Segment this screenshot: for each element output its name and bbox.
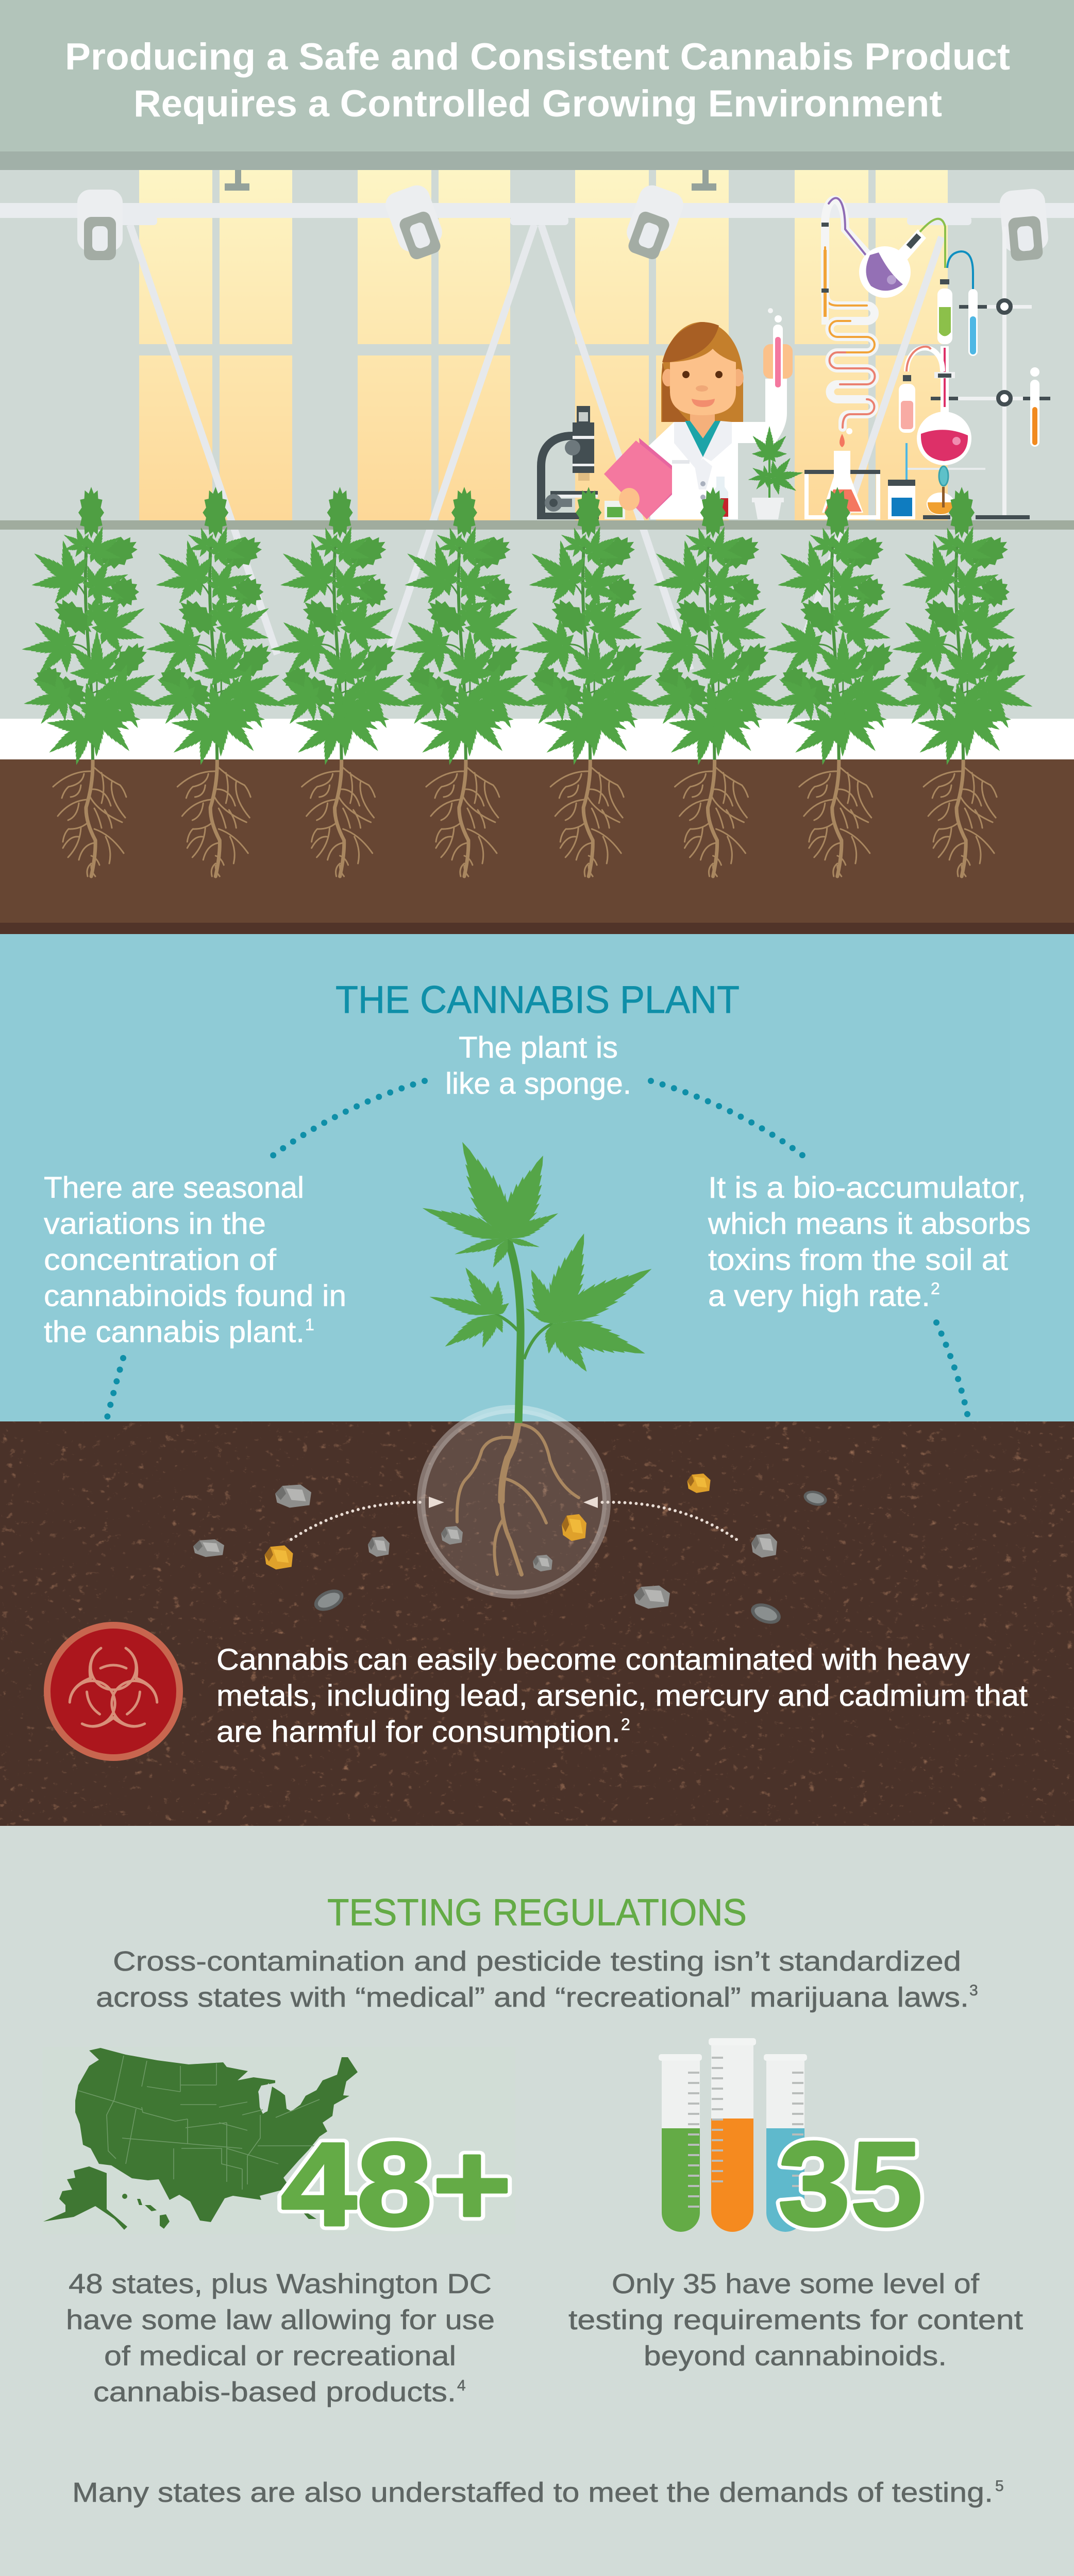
purple round flask [859,219,945,298]
stem [508,1239,521,1423]
panel: the cannabis plant [0,934,1074,1826]
red round flask [917,346,971,465]
text: seasonal variations [44,1171,346,1349]
green beaker [605,501,625,519]
potted seedling [746,426,807,519]
text: bio-accumulator: a very high rate. [708,1279,930,1313]
header title band [0,0,1074,151]
soil contaminants [193,1473,829,1628]
text: intro [96,1946,978,2013]
erlenmeyer flask on tripod [804,428,880,519]
orange test tube [1030,367,1039,447]
green syringe and blue tube [937,251,978,356]
text: bio-accumulator: which means it absorbs [708,1207,1031,1241]
soil band [0,759,1074,934]
coiled glass tubing [821,198,884,428]
icon: biohazard badge [44,1622,183,1761]
text: bio-accumulator: It is a bio-accumulator, [708,1171,1026,1205]
pink syringe and blue jar [888,347,943,519]
text: 48 states: of medical or recreational [104,2341,456,2371]
ceiling hangers [225,170,716,191]
text: contamination warning: Cannabis can easily become contaminated with heavy [216,1643,970,1676]
counter top [0,520,1074,530]
title: Producing a Safe and Consistent Cannabis Product [65,36,1010,78]
text: contamination warning [216,1643,1028,1749]
heading: THE CANNABIS PLANT [335,978,740,1021]
text: only 35: testing requirements for content [568,2304,1023,2335]
text: seasonal variations: cannabinoids found in [44,1279,346,1313]
text: 48 states: have some law allowing for use [66,2304,495,2335]
text: only 35 [568,2268,1023,2371]
scientist [604,308,793,519]
panel: grow room and laboratory scene [0,151,1074,934]
text: seasonal variations: There are seasonal [44,1171,304,1205]
magnifier lens over roots [421,1409,607,1595]
white planter strip [0,719,1074,759]
text: only 35: Only 35 have some level of [612,2268,980,2299]
text: only 35: beyond cannabinoids. [644,2341,947,2371]
microscope [540,406,599,519]
text: 48 states: 4 [457,2377,466,2394]
text: 48 states [66,2268,495,2408]
text: seasonal variations: 1 [305,1315,314,1334]
text: intro: across states with “medical” and “recreational” marijuana laws. [96,1982,969,2013]
text: contamination warning: are harmful for consumption. [216,1715,620,1749]
text: sponge: The plant is [459,1031,618,1064]
grow lamps [77,182,1050,264]
text: bio-accumulator: toxins from the soil at [708,1243,1008,1277]
text: 48 states: 48 states, plus Washington DC [69,2268,492,2299]
text: contamination warning: 2 [621,1715,630,1734]
leaves [419,1134,659,1378]
burner [923,466,954,519]
roots [457,1423,579,1574]
stat: 35: 35 [778,2117,922,2251]
icon: US map [42,2047,515,2234]
stat: 48+: 48+ [281,2118,512,2250]
arrow: contaminants drawn inward left [291,1497,444,1539]
text: intro: Cross-contamination and pesticide testing isn’t standardized [113,1946,961,1977]
panel: testing regulations and CBD findings [0,1826,1074,2576]
lab stand and clamps [908,227,1050,519]
text: sponge: like a sponge. [445,1067,631,1100]
title: Requires a Controlled Growing Environment [133,83,942,125]
stat: 35: 35 [778,2117,922,2251]
text: bio-accumulator: 2 [931,1279,940,1298]
text: sponge [445,1031,631,1100]
light rail [0,203,1074,225]
text: understaffed: Many states are also understaffed to meet the demands of testing. [72,2477,993,2508]
text: seasonal variations: concentration of [44,1243,277,1277]
text: seasonal variations: the cannabis plant. [44,1315,305,1349]
text: understaffed: 5 [995,2478,1004,2495]
stat: 48+: 48+ [281,2118,512,2250]
text: seasonal variations: variations in the [44,1207,266,1241]
central plant [419,1134,659,1574]
dotted arc [106,1081,969,1421]
row of cannabis plants [15,487,1043,876]
windows [139,170,948,520]
text: contamination warning: metals, including lead, arsenic, mercury and cadmium that [216,1679,1028,1713]
arrow: contaminants drawn inward right [583,1497,736,1539]
heading: TESTING REGULATIONS [327,1892,747,1934]
text: bio-accumulator [708,1171,1031,1313]
text: 48 states: cannabis-based products. [93,2377,456,2408]
title [65,36,1010,125]
icon: test tubes [659,2038,807,2232]
text: intro: 3 [969,1982,978,1999]
